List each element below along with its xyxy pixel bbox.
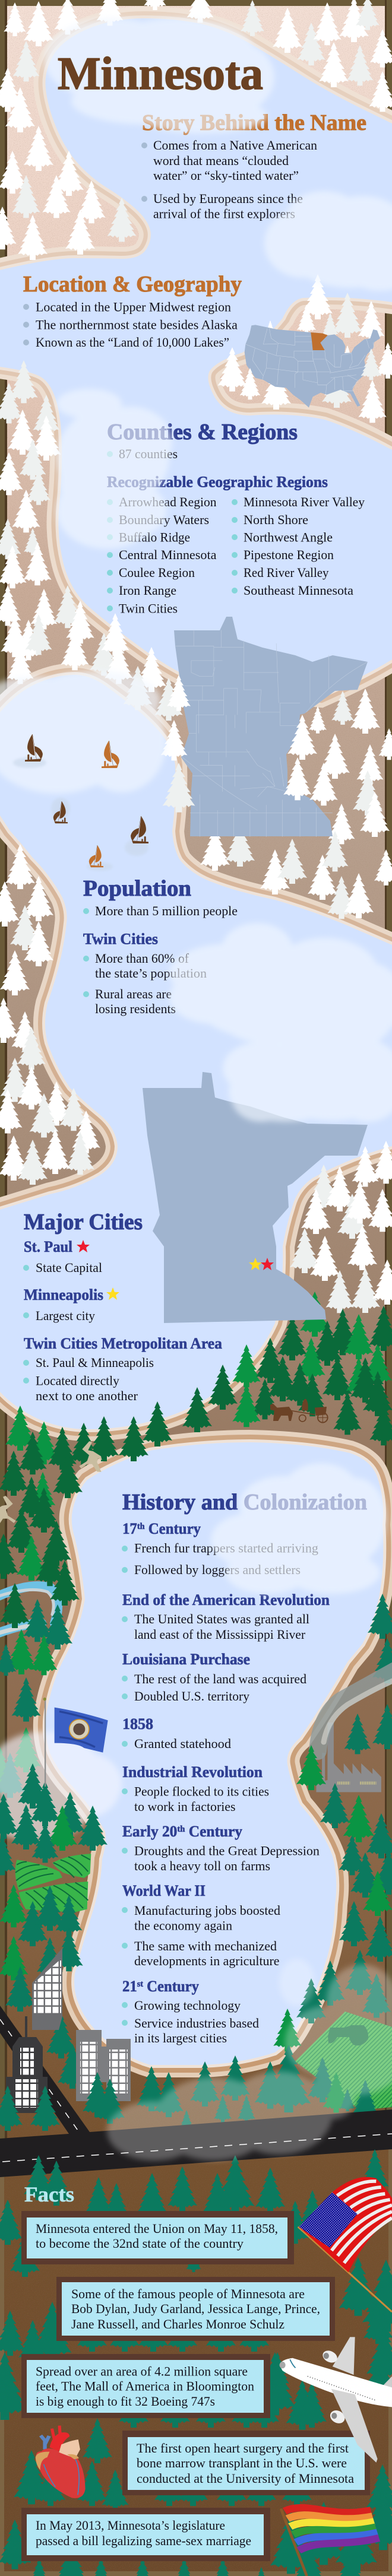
section: population: More than 60% of [95, 951, 189, 966]
heading: Location & Geography [23, 272, 242, 297]
section: major cities: St. Paul & Minneapolis [36, 1355, 154, 1370]
heading: History and Colonization [122, 1490, 367, 1515]
list: regions left column: Boundary Waters [119, 512, 209, 527]
section: major cities: Largest city [36, 1308, 95, 1323]
trees: right forest front [137, 1745, 392, 2133]
icon: sailboats on lake [13, 734, 148, 871]
section: major cities [23, 1210, 222, 1403]
cloud: sailboat lake [0, 671, 166, 794]
fact card 2: Jane Russell, and Charles Monroe Schulz [71, 2317, 284, 2331]
section: history and colonization: The same with mechanized [134, 1939, 277, 1953]
section: history and colonization: developments in agriculture [134, 1953, 279, 1968]
list: regions left column: Arrowhead Region [119, 494, 216, 509]
Minnesota highlight [311, 332, 328, 350]
lake: middle water with shore [0, 675, 392, 1429]
section: history and colonization: 17 [122, 1520, 138, 1537]
subheading: Twin Cities [83, 931, 158, 947]
heading: Facts [24, 2182, 74, 2206]
subheading: Recognizable Geographic Regions [107, 474, 328, 490]
section: history and colonization: The United States was granted all [134, 1611, 309, 1626]
building: dark skyscraper [6, 2016, 48, 2113]
section: location and geography: The northernmost state besides Alaska [36, 317, 238, 332]
fact card 3: is big enough to fit 32 Boeing 747s [36, 2394, 215, 2409]
section: history and colonization [122, 1490, 367, 2045]
lake: top water with shore [0, 18, 392, 696]
section: history and colonization: in its largest cities [134, 2031, 227, 2045]
section: population: the state’s population [95, 966, 207, 981]
list: regions right column: Red River Valley [244, 565, 329, 580]
building: twin gray towers [76, 2030, 131, 2101]
map: Minnesota population silhouette [143, 1072, 368, 1323]
section: population: More than 5 million people [95, 903, 238, 918]
icon: Minnesota state flag [43, 1698, 108, 1787]
fact card 2: Some of the famous people of Minnesota are [71, 2286, 305, 2301]
list: regions right column: North Shore [244, 512, 308, 527]
section: story behind the name: water” or “sky-tinted water” [153, 168, 299, 183]
section: history and colonization: Early 20 [122, 1823, 179, 1840]
fact card 3: feet, The Mall of America in Bloomington [36, 2379, 254, 2393]
building: gray slanted tower [32, 1948, 62, 2030]
section: history and colonization: The rest of the land was acquired [134, 1671, 306, 1686]
cloud: behind title [45, 18, 274, 134]
cloud: population large [169, 923, 392, 1122]
cloud: translucent lower history [107, 1959, 392, 2161]
lake: history water with shore [46, 1442, 383, 2065]
icon: factory [316, 1722, 381, 1792]
section: major cities: Minneapolis [24, 1286, 103, 1303]
icon: American flag [298, 2177, 392, 2312]
trees: bottom of history section [0, 2072, 125, 2131]
green trees: upper forest [0, 1292, 392, 1683]
section: history and colonization: Followed by loggers and settlers [134, 1562, 301, 1577]
section: history and colonization: th [177, 1825, 185, 1834]
section: major cities: Located directly [36, 1373, 119, 1388]
icon: lumberjack figures [0, 1441, 102, 1527]
trees: left history forest [0, 1763, 108, 1875]
list: regions right column: Northwest Angle [244, 529, 333, 545]
section: history and colonization: to work in factories [134, 1799, 235, 1814]
section: history and colonization: Droughts and the Great Depression [134, 1844, 320, 1858]
section: history and colonization: Louisiana Purchase [122, 1651, 250, 1668]
section: history and colonization: Manufacturing jobs boosted [134, 1903, 280, 1918]
section: population: losing residents [95, 1001, 176, 1016]
list: regions left column: Twin Cities [119, 601, 178, 616]
list: regions right column: Minnesota River Valley [244, 494, 365, 509]
fact card 1: Minnesota entered the Union on May 11, 1858, [36, 2221, 278, 2236]
list: regions left column: Buffalo Ridge [119, 529, 190, 545]
section: location and geography [23, 272, 242, 350]
cloud: counties [56, 389, 172, 549]
list: regions left column: Iron Range [119, 583, 176, 598]
fact card 4: bone marrow transplant in the U.S. were [137, 2456, 347, 2470]
snow drifts under boats [13, 757, 148, 871]
section: history and colonization: the economy again [134, 1918, 232, 1933]
fact card 4: conducted at the University of Minnesota [137, 2471, 354, 2486]
section: history and colonization: land east of the Mississippi River [134, 1627, 306, 1642]
fact card 5 [21, 2508, 270, 2561]
section: story behind the name: Used by Europeans since the [153, 191, 303, 206]
list: regions left column: Coulee Region [119, 565, 195, 580]
section: history and colonization: took a heavy toll on farms [134, 1858, 270, 1873]
trees: left history forest, faded behind cloud [0, 1677, 41, 1798]
list: regions right column: Southeast Minnesota [244, 583, 353, 598]
fact card 3: Spread over an area of 4.2 million square [36, 2364, 248, 2379]
section: history and colonization: Industrial Revolution [122, 1763, 263, 1781]
section: story behind the name: arrival of the first explorers [153, 207, 295, 221]
section: major cities: next to one another [36, 1388, 138, 1403]
section: history and colonization: Century [185, 1823, 242, 1840]
fact card 2 [56, 2277, 335, 2341]
cloud: over left forest [0, 1731, 122, 1840]
fact card 1: to become the 32nd state of the country [36, 2236, 244, 2251]
section: history and colonization: 1858 [122, 1715, 153, 1733]
fact card 5: In May 2013, Minnesota’s legislature [36, 2518, 225, 2533]
icon: farm fields [15, 1854, 91, 1912]
snowy trees [0, 0, 392, 1313]
heading: Counties & Regions [107, 420, 298, 445]
section: history and colonization: th [137, 1522, 145, 1531]
icon: red star [77, 1240, 90, 1252]
section: story behind the name [141, 110, 366, 221]
section: population [83, 876, 238, 1016]
section: history and colonization: Century [145, 1520, 201, 1537]
heading: Major Cities [24, 1210, 143, 1235]
icon: airplane [280, 2337, 392, 2463]
heading: Population [83, 876, 191, 901]
fact card 5: passed a bill legalizing same-sex marriage [36, 2533, 251, 2548]
title: Minnesota [58, 47, 263, 99]
section: location and geography: Known as the “Land of 10,000 Lakes” [36, 335, 229, 350]
section: history and colonization: Doubled U.S. territory [134, 1689, 249, 1703]
fact card 4: The first open heart surgery and the first [137, 2441, 349, 2456]
section: location and geography: Located in the Upper Midwest region [36, 299, 231, 315]
trees: in front of Minnesota map [154, 675, 338, 813]
factory smoke [318, 1671, 392, 1751]
section: population: Rural areas are [95, 986, 172, 1001]
fact card 1 [21, 2211, 294, 2264]
list: regions right column: Pipestone Region [244, 547, 334, 562]
section: major cities: St. Paul [24, 1238, 72, 1255]
icon: rainbow flag [281, 2508, 379, 2576]
icon: city buildings [6, 1948, 131, 2113]
icon: state capital and largest city stars on map [249, 1258, 274, 1270]
icon: human heart [36, 2426, 86, 2498]
section: history and colonization: Granted statehood [134, 1736, 231, 1751]
section: counties and regions [107, 420, 365, 616]
section: history and colonization: Century [143, 1978, 199, 1995]
section: history and colonization: Growing technology [134, 1998, 241, 2013]
trees: forest over farm and lower left [0, 1704, 392, 2089]
map: Minnesota counties [174, 617, 368, 837]
section: history and colonization: People flocked to its cities [134, 1784, 269, 1798]
cloud: history [211, 1463, 386, 1594]
section: story behind the name: Comes from a Native American [153, 138, 317, 153]
section: history and colonization: 21 [122, 1978, 138, 1995]
section: story behind the name: word that means “clouded [153, 153, 289, 168]
heading: Story Behind the Name [142, 110, 366, 135]
clouds overlaying the lakes and text [0, 18, 392, 1594]
section: history and colonization: World War II [122, 1882, 206, 1899]
section: counties and regions: 87 counties [119, 446, 178, 461]
icon: horse and carriage [270, 1399, 328, 1423]
fact card 4 [122, 2431, 370, 2495]
cloud: right of story [264, 191, 392, 291]
road [0, 2006, 392, 2177]
trees: behind facts [0, 2149, 392, 2576]
section: history and colonization: st [137, 1979, 143, 1989]
section: history and colonization: Service industries based [134, 2016, 259, 2031]
map: USA with Minnesota highlighted [245, 325, 380, 408]
section: history and colonization: End of the American Revolution [122, 1591, 330, 1609]
list: regions left column [107, 494, 217, 616]
section: major cities: Twin Cities Metropolitan Area [24, 1335, 222, 1352]
list: regions left column: Central Minnesota [119, 547, 217, 562]
list: regions right column [232, 494, 365, 598]
icon: yellow star [106, 1287, 119, 1300]
section: major cities: State Capital [36, 1260, 102, 1275]
trees: in front of USA map [217, 347, 381, 399]
river [0, 1586, 58, 1633]
section: facts [21, 2182, 370, 2561]
section: history and colonization: French fur trappers started arriving [134, 1541, 318, 1555]
icon: right field with tractor [295, 2012, 392, 2110]
fact card 2: Bob Dylan, Judy Garland, Jessica Lange, Prince, [71, 2301, 320, 2316]
fact card 3 [21, 2354, 270, 2418]
